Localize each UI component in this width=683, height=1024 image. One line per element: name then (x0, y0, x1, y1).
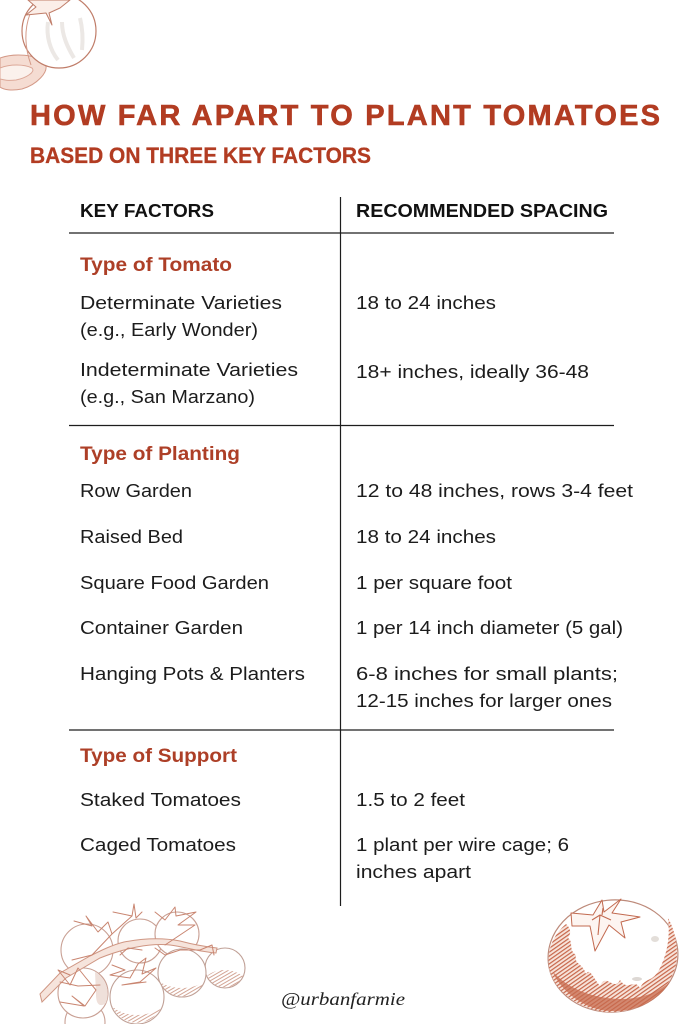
row: row garden: Row Garden (80, 481, 192, 501)
title: HOW FAR APART TO PLANT TOMATOES (30, 100, 660, 132)
table: key factors and recommended spacing (69, 197, 633, 906)
icon: cherry tomatoes on the vine (40, 904, 245, 1024)
row: determinate varieties (80, 293, 496, 340)
row: caged tomatoes: 1 plant per wire cage; 6 (356, 835, 569, 855)
row: square food garden: Square Food Garden (80, 573, 269, 593)
section heading: type of support: Type of Support (80, 746, 238, 767)
section heading: type of tomato: Type of Tomato (80, 255, 232, 276)
row: raised bed (80, 527, 496, 547)
row: staked tomatoes: Staked Tomatoes (80, 790, 241, 810)
row: indeterminate varieties: (e.g., San Marzano) (80, 387, 255, 407)
credit: handle: @urbanfarmie (281, 989, 405, 1009)
row: caged tomatoes: Caged Tomatoes (80, 835, 236, 855)
row: hanging pots and planters (80, 664, 618, 711)
section heading: type of planting: Type of Planting (80, 444, 240, 465)
row: determinate varieties: Determinate Varieties (80, 293, 282, 313)
row: staked tomatoes (80, 790, 465, 810)
icon: large tomato, bottom right (543, 894, 683, 1018)
row: raised bed: Raised Bed (80, 527, 183, 547)
row: square food garden (80, 573, 512, 593)
row: determinate varieties: (e.g., Early Wonder) (80, 320, 258, 340)
column heading: recommended spacing: RECOMMENDED SPACING (356, 201, 608, 221)
row: hanging pots and planters: Hanging Pots & Planters (80, 664, 305, 684)
row: caged tomatoes: inches apart (356, 862, 471, 882)
row: container garden: 1 per 14 inch diameter (5 gal) (356, 618, 623, 638)
row: container garden: Container Garden (80, 618, 243, 638)
row: raised bed: 18 to 24 inches (356, 527, 496, 547)
subtitle: BASED ON THREE KEY FACTORS (30, 143, 371, 168)
row: row garden: 12 to 48 inches, rows 3-4 feet (356, 481, 633, 501)
row: staked tomatoes: 1.5 to 2 feet (356, 790, 465, 810)
row: square food garden: 1 per square foot (356, 573, 512, 593)
row: hanging pots and planters: 12-15 inches for larger ones (356, 691, 612, 711)
row: hanging pots and planters: 6-8 inches for small plants; (356, 664, 618, 684)
icon: tomato and slice, top left (0, 0, 96, 90)
row: row garden (80, 481, 633, 501)
column heading: key factors: KEY FACTORS (80, 201, 214, 221)
row: determinate varieties: 18 to 24 inches (356, 293, 496, 313)
row: indeterminate varieties: 18+ inches, ideally 36-48 (356, 362, 589, 382)
row: indeterminate varieties: Indeterminate Varieties (80, 360, 298, 380)
row: indeterminate varieties (80, 360, 589, 407)
row: container garden (80, 618, 623, 638)
row: caged tomatoes (80, 835, 569, 882)
